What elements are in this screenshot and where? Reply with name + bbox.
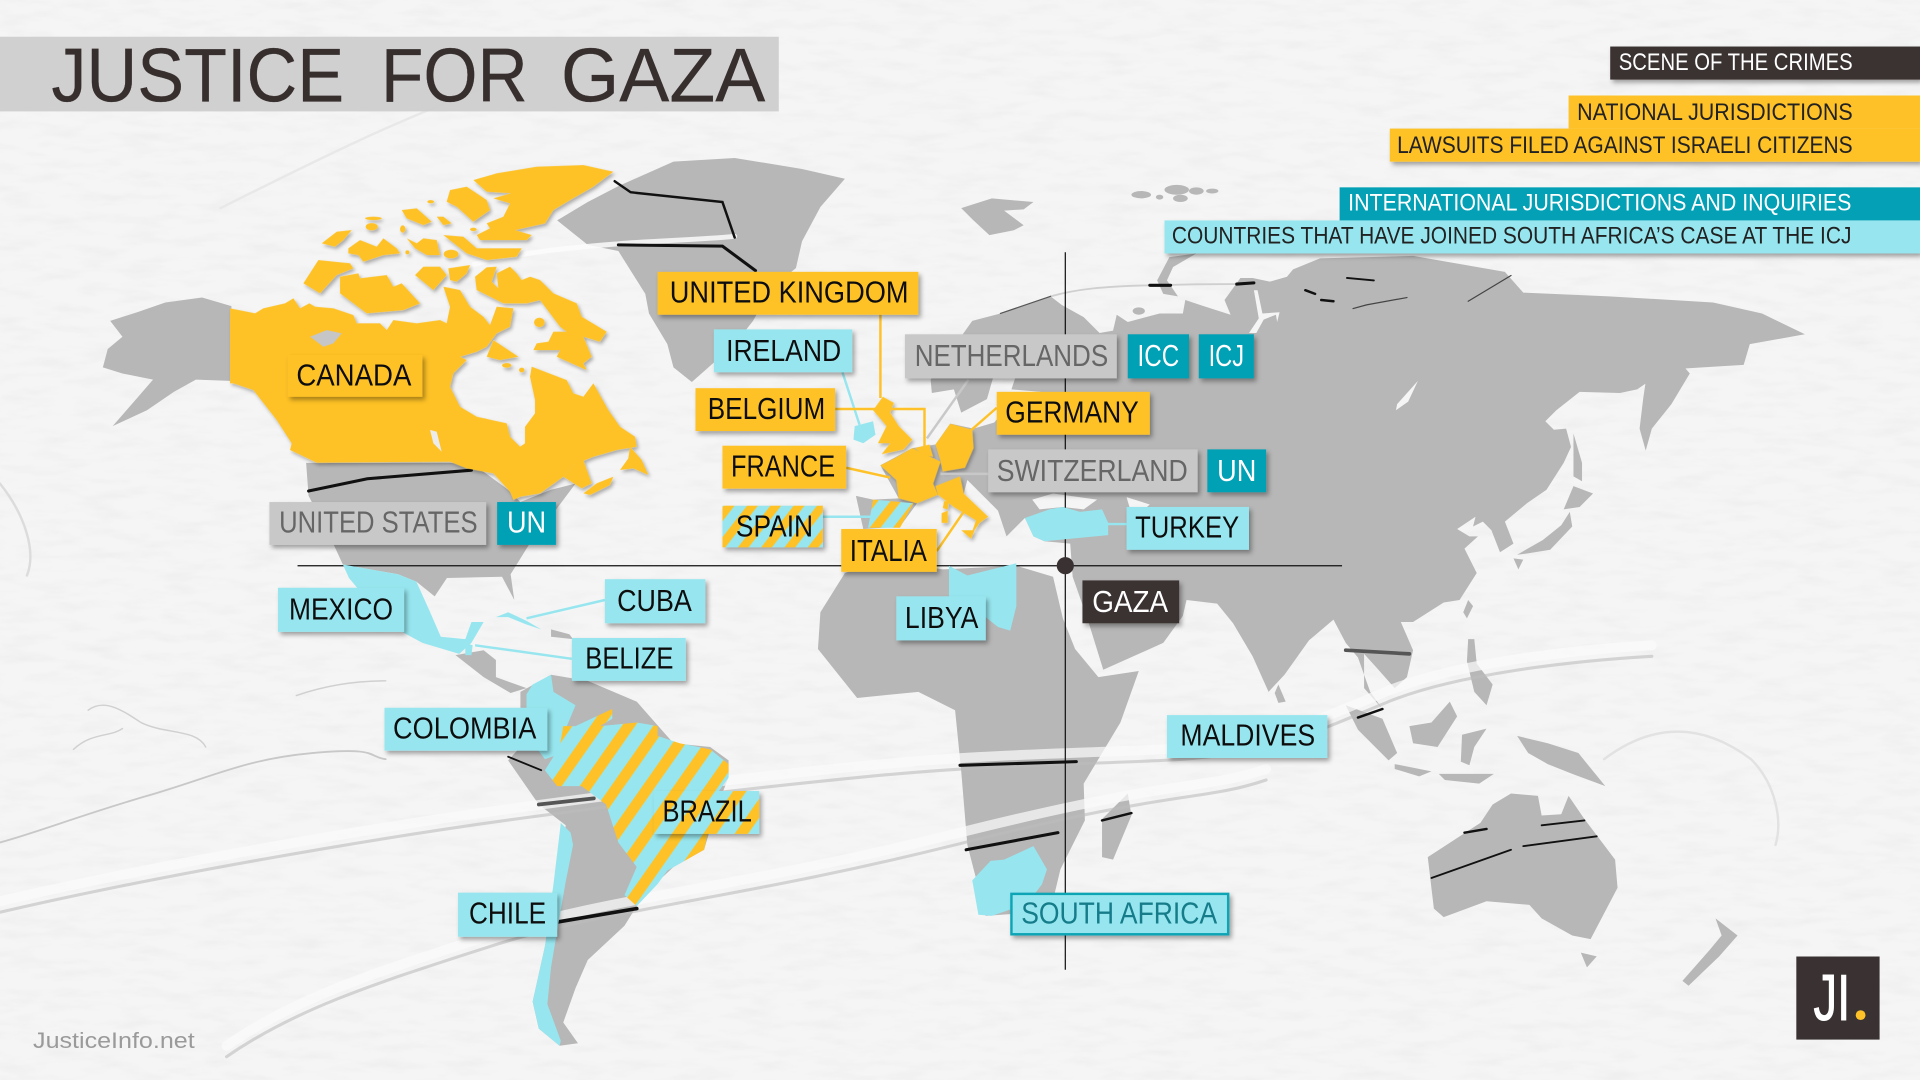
land: Sulawesi xyxy=(1461,729,1487,765)
country: Sicily xyxy=(961,530,975,539)
sea: Ob river xyxy=(1249,290,1280,333)
map seams xyxy=(309,181,1597,922)
land: Novaya Zemlya xyxy=(1157,253,1196,296)
label: Libya xyxy=(896,596,986,640)
label: France xyxy=(722,446,846,489)
country: Mexico xyxy=(343,564,484,654)
connector lines xyxy=(475,315,1127,659)
label: Mexico: MEXICO xyxy=(289,593,393,627)
land: New Zealand xyxy=(1682,918,1738,986)
label: Turkey: TURKEY xyxy=(1135,511,1239,545)
label: Turkey xyxy=(1127,507,1249,550)
connector: Italia xyxy=(937,512,964,551)
country: United Kingdom xyxy=(873,397,912,454)
label: South Africa: SOUTH AFRICA xyxy=(1021,896,1218,930)
label: United Kingdom: UNITED KINGDOM xyxy=(670,275,909,309)
label: United States xyxy=(269,502,486,545)
country: Coats Island xyxy=(502,363,511,368)
land: Eurasia xyxy=(856,256,1805,709)
land: Honshu xyxy=(1517,512,1572,555)
country: Ellef Ringnes xyxy=(402,208,432,225)
connector: Ireland xyxy=(842,372,860,425)
country: Bathurst group xyxy=(407,238,440,255)
highlighted countries: joined ICJ case xyxy=(343,421,1108,1046)
country: Brazil (striped) xyxy=(545,709,729,906)
label: Ireland: IRELAND xyxy=(726,334,841,368)
land: Central America xyxy=(456,650,527,693)
land: Sakhalin xyxy=(1573,433,1582,481)
country: Cornwallis xyxy=(437,217,452,225)
label: Italia xyxy=(841,529,937,572)
country: Italy xyxy=(936,476,988,535)
land: Lesser Sunda islands xyxy=(1439,774,1494,784)
label: Spain xyxy=(722,506,823,547)
land: Madagascar xyxy=(1102,793,1131,860)
country: Nova Scotia xyxy=(583,477,613,495)
country: Baffin Island xyxy=(475,267,607,370)
land: Alaska xyxy=(103,298,231,426)
label: Colombia: COLOMBIA xyxy=(393,711,537,745)
land: Africa xyxy=(818,561,1139,916)
country: Devon Island xyxy=(443,235,522,260)
land: South America xyxy=(508,675,729,1046)
label: Mexico xyxy=(278,588,404,632)
country: Belgium xyxy=(915,444,933,457)
legend: scene of the crimes: SCENE OF THE CRIMES xyxy=(1619,49,1853,76)
legend: international jurisdictions: INTERNATIONAL JURISDICTIONS AND INQUIRIES xyxy=(1348,190,1851,217)
country: Corsica xyxy=(943,501,949,509)
country: South Africa xyxy=(972,846,1047,916)
country: Southampton Island xyxy=(487,340,518,360)
country: France xyxy=(880,448,940,503)
land: Java xyxy=(1395,764,1431,776)
label: Belgium: BELGIUM xyxy=(708,392,825,426)
label: UN (New York) xyxy=(497,502,556,545)
label: Maldives: MALDIVES xyxy=(1180,719,1315,753)
connector: France xyxy=(846,468,890,478)
land: Sumatra xyxy=(1346,705,1397,760)
country: Victoria Island xyxy=(340,273,420,313)
label: United States: UNITED STATES xyxy=(279,506,478,540)
legend: lawsuits: LAWSUITS FILED AGAINST ISRAELI CITIZENS xyxy=(1397,132,1853,159)
country: Ireland xyxy=(853,421,876,443)
label: Belgium xyxy=(696,388,835,431)
country: Turkey xyxy=(1025,507,1108,541)
source credit: JusticeInfo.net xyxy=(33,1028,195,1053)
label: Netherlands xyxy=(905,334,1117,378)
connector: Netherlands xyxy=(927,380,969,438)
land: Svalbard xyxy=(961,198,1033,235)
land: Hispaniola xyxy=(551,629,573,639)
land: Borneo xyxy=(1409,702,1457,747)
land: Franz Josef islands xyxy=(1131,185,1218,202)
country: Prince Patrick Island xyxy=(322,230,352,247)
title xyxy=(0,34,779,119)
land: New Guinea xyxy=(1517,736,1605,786)
connector: Turkey xyxy=(1102,523,1127,525)
sea: Caspian xyxy=(1127,497,1150,514)
highlighted countries: national jurisdictions xyxy=(230,165,988,539)
land: Kolguev xyxy=(1133,307,1145,315)
label: France: FRANCE xyxy=(731,449,835,483)
land: Kyushu xyxy=(1513,558,1523,569)
label: Maldives xyxy=(1167,715,1327,758)
label: Cuba: CUBA xyxy=(617,584,692,618)
title: JUSTICE xyxy=(51,34,344,119)
country: Belize xyxy=(465,643,473,655)
land: Kamchatka xyxy=(1640,365,1690,451)
world map: grey land xyxy=(103,158,1805,1046)
label: UN (Geneva) xyxy=(1207,449,1266,492)
title: FOR xyxy=(381,34,528,119)
connector: Belgium xyxy=(835,409,924,448)
label: Libya: LIBYA xyxy=(905,601,979,635)
country: New Brunswick xyxy=(563,460,592,488)
land: Australia xyxy=(1428,793,1618,939)
country: Libya xyxy=(949,563,1016,631)
country: Chile xyxy=(533,823,573,1046)
label: UN (New York): UN xyxy=(507,506,546,540)
label: ICC xyxy=(1128,334,1189,378)
connector: Switzerland xyxy=(940,473,988,475)
country: Spain (striped) xyxy=(868,500,913,528)
lake: Great Bear xyxy=(310,330,342,347)
connector: Cuba xyxy=(527,600,605,618)
country: small arctic islands xyxy=(365,200,477,258)
label: ICJ: ICJ xyxy=(1209,339,1244,373)
land: Sri Lanka xyxy=(1275,684,1286,703)
label: Chile xyxy=(458,893,557,937)
logo xyxy=(1796,956,1880,1040)
country: Newfoundland xyxy=(620,447,648,475)
label: ICJ xyxy=(1199,334,1254,378)
land: Greenland xyxy=(557,158,845,382)
label: Cuba xyxy=(605,579,705,623)
connector: Spain xyxy=(823,516,872,518)
country: Mansel Island xyxy=(519,368,524,372)
label: UN (Geneva): UN xyxy=(1217,454,1256,488)
legend: national jurisdictions: NATIONAL JURISDICTIONS xyxy=(1577,99,1853,126)
label: Brazil xyxy=(654,791,759,834)
label: Chile: CHILE xyxy=(469,896,546,930)
country: Ellesmere Island xyxy=(473,165,613,240)
label: Spain: SPAIN xyxy=(736,509,813,543)
label: Gaza: GAZA xyxy=(1092,585,1169,619)
legend xyxy=(1164,47,1920,253)
logo: JI xyxy=(1813,961,1850,1034)
title: GAZA xyxy=(561,34,766,119)
country: Sardinia xyxy=(942,511,948,523)
land: United States xyxy=(306,463,576,600)
sea: Baikal xyxy=(1396,381,1418,410)
connector: Belize xyxy=(475,645,572,659)
lake: Winnipeg xyxy=(430,430,442,452)
country: Banks Island xyxy=(303,260,353,293)
country: Canada mainland xyxy=(230,287,637,500)
label: Gaza xyxy=(1082,580,1179,623)
label: Brazil: BRAZIL xyxy=(662,795,752,829)
label: ICC: ICC xyxy=(1138,339,1179,373)
country: Germany xyxy=(936,424,973,471)
label: Italia: ITALIA xyxy=(850,534,927,568)
label: Germany: GERMANY xyxy=(1005,395,1139,429)
country: Colombia xyxy=(527,675,576,759)
crosshair centred on Gaza xyxy=(298,252,1342,970)
country: Prince of Wales Island xyxy=(415,267,447,290)
inland seas xyxy=(1032,290,1418,514)
country: Melville Island xyxy=(348,238,400,262)
label: Ireland xyxy=(714,329,852,372)
sea: Black Sea xyxy=(1032,493,1097,509)
land: Taiwan xyxy=(1463,600,1473,618)
label: Canada: CANADA xyxy=(296,359,412,393)
country: Somerset Island xyxy=(448,265,470,282)
country: Axel Heiberg Island xyxy=(447,187,490,222)
connector: Germany xyxy=(967,408,997,433)
Canada and Arctic archipelago xyxy=(230,165,648,500)
country: Prince Charles Island xyxy=(534,318,545,327)
land: Hokkaido xyxy=(1564,486,1593,509)
label: Switzerland: SWITZERLAND xyxy=(997,454,1188,488)
label: Belize: BELIZE xyxy=(585,642,673,676)
country: Cuba xyxy=(496,612,541,629)
land: Philippines xyxy=(1467,639,1493,705)
connector: UK xyxy=(879,315,881,398)
land: Tasmania xyxy=(1581,953,1597,967)
label: Netherlands: NETHERLANDS xyxy=(915,339,1108,373)
label: Belize xyxy=(572,638,686,681)
